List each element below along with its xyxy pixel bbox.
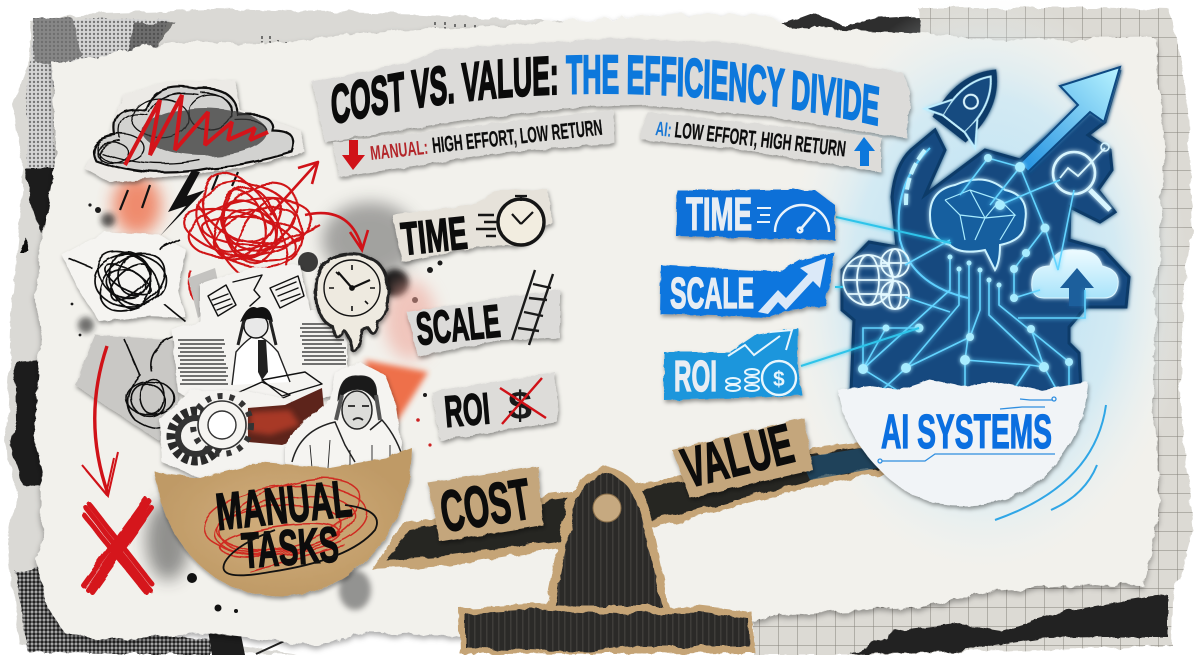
balance beam xyxy=(372,440,884,570)
red wash under cloud xyxy=(113,175,161,235)
melting clock xyxy=(316,254,388,351)
circuit traces xyxy=(863,158,1085,392)
scrap: black blocks left xyxy=(10,169,56,486)
rocket trail arc xyxy=(899,148,968,298)
left metric: time xyxy=(393,190,552,265)
AI systems heading: AI SYSTEMS xyxy=(881,406,1052,459)
scrap: black and line bottom xyxy=(208,630,304,655)
manual strip xyxy=(333,110,615,177)
blue scale strip xyxy=(660,253,835,317)
desk papers xyxy=(226,372,322,410)
heading: manual: MANUAL xyxy=(213,470,355,542)
bulb outline and knot xyxy=(124,335,178,429)
scrap: grid paper right xyxy=(740,0,1200,655)
beam corrugated dark xyxy=(385,446,878,560)
fulcrum base dark xyxy=(464,608,750,652)
blue time strip xyxy=(676,190,835,240)
left metric: ROI xyxy=(432,372,558,440)
clock hands xyxy=(324,260,380,316)
lightning bolt xyxy=(160,170,205,236)
time strip xyxy=(393,190,552,262)
manual text: MANUAL: xyxy=(369,137,429,165)
gears paper xyxy=(160,388,326,478)
title text on arc: COST VS. VALUE: THE EFFICIENCY DIVIDE xyxy=(331,54,880,126)
ink and watercolor stains xyxy=(71,175,442,613)
bowl: AI systems xyxy=(838,380,1106,520)
black knot xyxy=(68,240,186,322)
white gear xyxy=(193,396,251,454)
cost word: COST xyxy=(436,467,535,545)
fulcrum base tan xyxy=(459,604,755,654)
fulcrum corrugated body xyxy=(556,472,664,608)
bowl: manual tasks xyxy=(155,448,412,596)
circuit decoration xyxy=(878,397,1056,463)
clock body and drips xyxy=(316,254,388,351)
up arrow xyxy=(854,137,875,166)
grey scrap behind worker xyxy=(188,268,222,318)
gears sheet xyxy=(160,390,300,478)
scale word: SCALE xyxy=(670,269,754,318)
black scribble paper xyxy=(62,232,186,322)
subheading: AI xyxy=(641,112,881,172)
AI strip xyxy=(641,112,881,172)
cyan ROI strip xyxy=(664,328,802,400)
white bowl xyxy=(838,380,1088,506)
beam torn tan edge xyxy=(372,440,884,570)
left metric: scale xyxy=(407,270,560,356)
title banner xyxy=(310,38,914,147)
red scribble with arrows xyxy=(178,159,368,301)
high effort text: HIGH EFFORT, LOW RETURN xyxy=(431,115,604,158)
heading: tasks: TASKS xyxy=(240,516,341,579)
ink around bowl xyxy=(146,500,190,580)
subheading: manual xyxy=(333,110,615,177)
pink ink stain xyxy=(384,280,436,360)
globes xyxy=(843,249,909,309)
red X mark xyxy=(84,500,152,592)
circuit nodes xyxy=(858,154,1073,374)
ROI strip xyxy=(432,372,558,440)
right metric: ROI xyxy=(664,328,802,401)
scale word: SCALE xyxy=(414,294,503,355)
connector lines to metrics xyxy=(801,217,951,366)
dark red patch xyxy=(248,388,326,445)
title strip xyxy=(312,38,910,142)
growth arrow icon xyxy=(758,258,826,314)
motion swooshes xyxy=(995,405,1106,520)
ladder icon xyxy=(512,270,553,345)
blue glow behind AI side xyxy=(780,0,1190,575)
upload cloud xyxy=(1032,250,1118,306)
scrap: black strip bottom right xyxy=(850,595,1168,654)
red curved arrow down xyxy=(82,346,118,496)
kraft bowl xyxy=(155,448,412,596)
worker sheet xyxy=(172,265,348,412)
pivot circle xyxy=(593,494,621,522)
man figure xyxy=(292,376,405,468)
scrap: black strip top xyxy=(780,13,922,40)
black loop xyxy=(223,505,377,575)
ROI word: ROI xyxy=(443,384,492,437)
cost tag card xyxy=(428,466,543,542)
value tag card xyxy=(672,418,813,498)
speedometer icon xyxy=(757,205,829,232)
storm cloud with lightning xyxy=(84,80,305,236)
scrap: halftone top left xyxy=(26,16,176,168)
growth arrow xyxy=(1020,67,1120,172)
time word: TIME xyxy=(686,188,752,240)
ROI word: ROI xyxy=(674,352,717,401)
man sheet xyxy=(285,362,405,470)
coins and arrow icon: $ xyxy=(773,368,785,391)
AI label: AI: xyxy=(654,118,673,142)
paper stacks xyxy=(178,324,346,384)
value word: VALUE xyxy=(676,411,800,500)
fulcrum xyxy=(455,460,760,655)
red arrow up right xyxy=(270,162,318,215)
time word: TIME xyxy=(399,206,470,265)
dark gear xyxy=(172,412,220,460)
down arrow xyxy=(342,140,365,170)
red scribble on bowl xyxy=(200,464,370,572)
rocket xyxy=(925,54,1018,148)
stressed worker paper with paper stacks xyxy=(172,265,348,412)
scrap: newspaper column text xyxy=(262,22,475,102)
torn cloud paper xyxy=(84,80,305,182)
grey torn scrap xyxy=(75,335,180,445)
magnifier xyxy=(1053,143,1110,210)
scrap: dark halftone bottom left xyxy=(14,566,212,655)
dark silhouette xyxy=(842,70,1129,392)
red zigzag xyxy=(125,95,268,165)
grey ink wash xyxy=(322,202,418,278)
stopwatch icon xyxy=(476,196,544,245)
scale strip xyxy=(407,290,560,356)
fulcrum tan edge xyxy=(545,466,670,610)
tag: cost xyxy=(428,466,543,545)
right metric: time xyxy=(676,188,835,240)
crossed dollar icon: $ xyxy=(508,384,532,428)
worker figure xyxy=(232,307,290,385)
brain xyxy=(930,180,1026,270)
frustrated man paper xyxy=(285,362,405,470)
AI circuit illustration xyxy=(842,54,1129,392)
scribble paper sheet xyxy=(62,232,186,322)
scrap: grey newspaper layer xyxy=(5,9,790,655)
tag: value xyxy=(672,411,813,500)
low effort text: LOW EFFORT, HIGH RETURN xyxy=(673,117,847,161)
flying papers xyxy=(208,275,304,316)
cloud sketch xyxy=(92,86,294,172)
black blots xyxy=(71,203,442,447)
right metric: scale xyxy=(660,253,835,318)
beam right blue tint xyxy=(800,446,878,480)
rain strokes xyxy=(120,172,238,210)
red arrow curved to clock xyxy=(305,213,368,250)
orange wash right of worker xyxy=(365,360,428,426)
grey scrap with scribbled bulb xyxy=(75,335,180,445)
